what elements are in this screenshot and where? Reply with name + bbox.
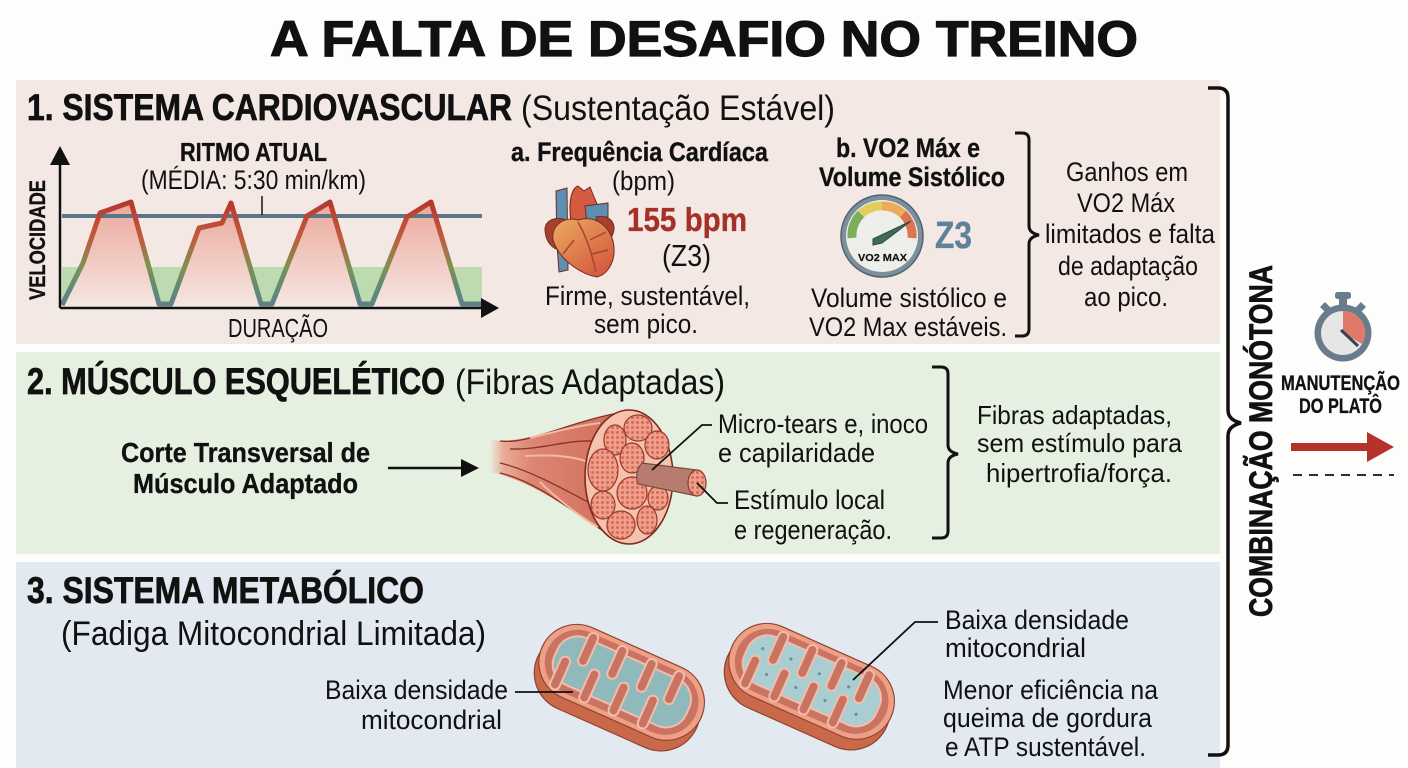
text block: fibras adaptadas: [977, 400, 1183, 488]
heading: sistema cardiovascular: (Sustentação Estável): [521, 89, 835, 128]
text block: menor eficiência: [943, 675, 1159, 762]
vertical label: combinação monótona: COMBINAÇÃO MONÓTONA: [1243, 265, 1279, 617]
panel: músculo esquelético: [16, 352, 1220, 554]
icon: mitochondrion left: [522, 612, 717, 763]
callout: baixa densidade right: [853, 605, 1129, 680]
callout: baixa densidade left: Baixa densidade: [325, 675, 508, 705]
heading: sistema metabólico: 3. SISTEMA METABÓLICO: [27, 569, 424, 611]
text block: vo2 máx e volume sistólico: b. VO2 Máx e: [836, 133, 980, 163]
text block: frequência cardíaca: [511, 137, 769, 339]
text block: vo2 máx e volume sistólico: Volume Sistólico: [819, 162, 1005, 192]
text block: ganhos em vo2 máx: VO2 Máx: [1077, 188, 1175, 218]
callout: estímulo local: e regeneração.: [734, 515, 892, 545]
text block: vo2 máx e volume sistólico: Volume sistólico e: [811, 283, 1007, 313]
text block: vo2 máx e volume sistólico: Z3: [935, 215, 972, 257]
text block: ganhos em vo2 máx: limitados e falta: [1045, 219, 1216, 249]
chart: ritmo atual: VELOCIDADE: [25, 180, 50, 300]
panel: sistema cardiovascular: [16, 80, 1220, 344]
heading: sistema cardiovascular: [27, 87, 835, 128]
callout: estímulo local: [697, 483, 892, 545]
icon: mitochondrion right: [712, 611, 907, 762]
text block: ganhos em vo2 máx: ao pico.: [1084, 282, 1168, 312]
icon: vo2 max gauge: VO2 MAX: [858, 252, 907, 264]
label: manutenção do platô: DO PLATÔ: [1299, 394, 1382, 418]
text block: corte transversal: Músculo Adaptado: [133, 468, 358, 499]
text block: frequência cardíaca: a. Frequência Cardíaca: [511, 137, 769, 167]
text block: fibras adaptadas: Fibras adaptadas,: [977, 400, 1172, 430]
text block: corte transversal: Corte Transversal de: [121, 437, 370, 468]
big bracket: all systems: [1208, 88, 1241, 755]
callout: estímulo local: Estímulo local: [734, 485, 885, 515]
callout: baixa densidade left: mitocondrial: [361, 705, 502, 735]
text block: fibras adaptadas: sem estímulo para: [977, 428, 1183, 458]
heading: sistema metabólico: [27, 569, 486, 653]
chart: ritmo atual: (MÉDIA: 5:30 min/km): [141, 165, 366, 195]
heading: sistema metabólico: (Fadiga Mitocondrial Limitada): [61, 615, 486, 653]
callout: baixa densidade left: [325, 675, 573, 735]
chart: ritmo atual: RITMO ATUAL: [180, 137, 327, 167]
bracket: músculo: [932, 367, 958, 538]
text block: frequência cardíaca: Firme, sustentável,: [545, 281, 750, 311]
text block: frequência cardíaca: (bpm): [612, 166, 675, 196]
text block: frequência cardíaca: (Z3): [662, 238, 711, 273]
text block: ganhos em vo2 máx: [1045, 157, 1216, 312]
bracket: cardiovascular: [1015, 133, 1039, 336]
arrow: red plateau: [1291, 432, 1394, 462]
heading: músculo esquelético: (Fibras Adaptadas): [455, 363, 725, 402]
title: A FALTA DE DESAFIO NO TREINO: [270, 11, 1138, 67]
callout: baixa densidade right: mitocondrial: [945, 633, 1086, 663]
callout: micro-tears: [652, 409, 928, 470]
text block: menor eficiência: Menor eficiência na: [943, 675, 1159, 705]
text block: fibras adaptadas: hipertrofia/força.: [986, 458, 1172, 488]
icon: heart: [545, 186, 614, 277]
text block: frequência cardíaca: 155 bpm: [627, 201, 747, 238]
text block: vo2 máx e volume sistólico: VO2 Max estáveis.: [809, 312, 1007, 342]
text block: menor eficiência: queima de gordura: [943, 703, 1153, 733]
icon: muscle cross-section: [490, 410, 706, 544]
callout: micro-tears: e capilaridade: [718, 438, 875, 468]
icon: stopwatch: [1314, 292, 1372, 362]
text block: corte transversal: [121, 437, 370, 499]
text block: ganhos em vo2 máx: Ganhos em: [1066, 157, 1188, 187]
dashed baseline: [1293, 474, 1394, 476]
text block: vo2 máx e volume sistólico: [809, 133, 1007, 342]
text block: ganhos em vo2 máx: de adaptação: [1058, 251, 1198, 281]
arrow: to muscle: [388, 459, 479, 477]
callout: baixa densidade right: Baixa densidade: [945, 605, 1129, 635]
text block: menor eficiência: e ATP sustentável.: [945, 732, 1146, 762]
heading: sistema cardiovascular: 1. SISTEMA CARDIOVASCULAR: [27, 87, 512, 128]
label: manutenção do platô: [1281, 372, 1400, 418]
text block: frequência cardíaca: sem pico.: [594, 309, 698, 339]
heading: músculo esquelético: 2. MÚSCULO ESQUELÉTICO: [27, 360, 445, 402]
callout: micro-tears: Micro-tears e, inoco: [718, 409, 928, 439]
chart: ritmo atual: [25, 137, 499, 343]
chart: ritmo atual: DURAÇÃO: [228, 313, 328, 343]
icon: vo2 max gauge: [841, 195, 923, 277]
panel: sistema metabólico: [16, 562, 1220, 768]
